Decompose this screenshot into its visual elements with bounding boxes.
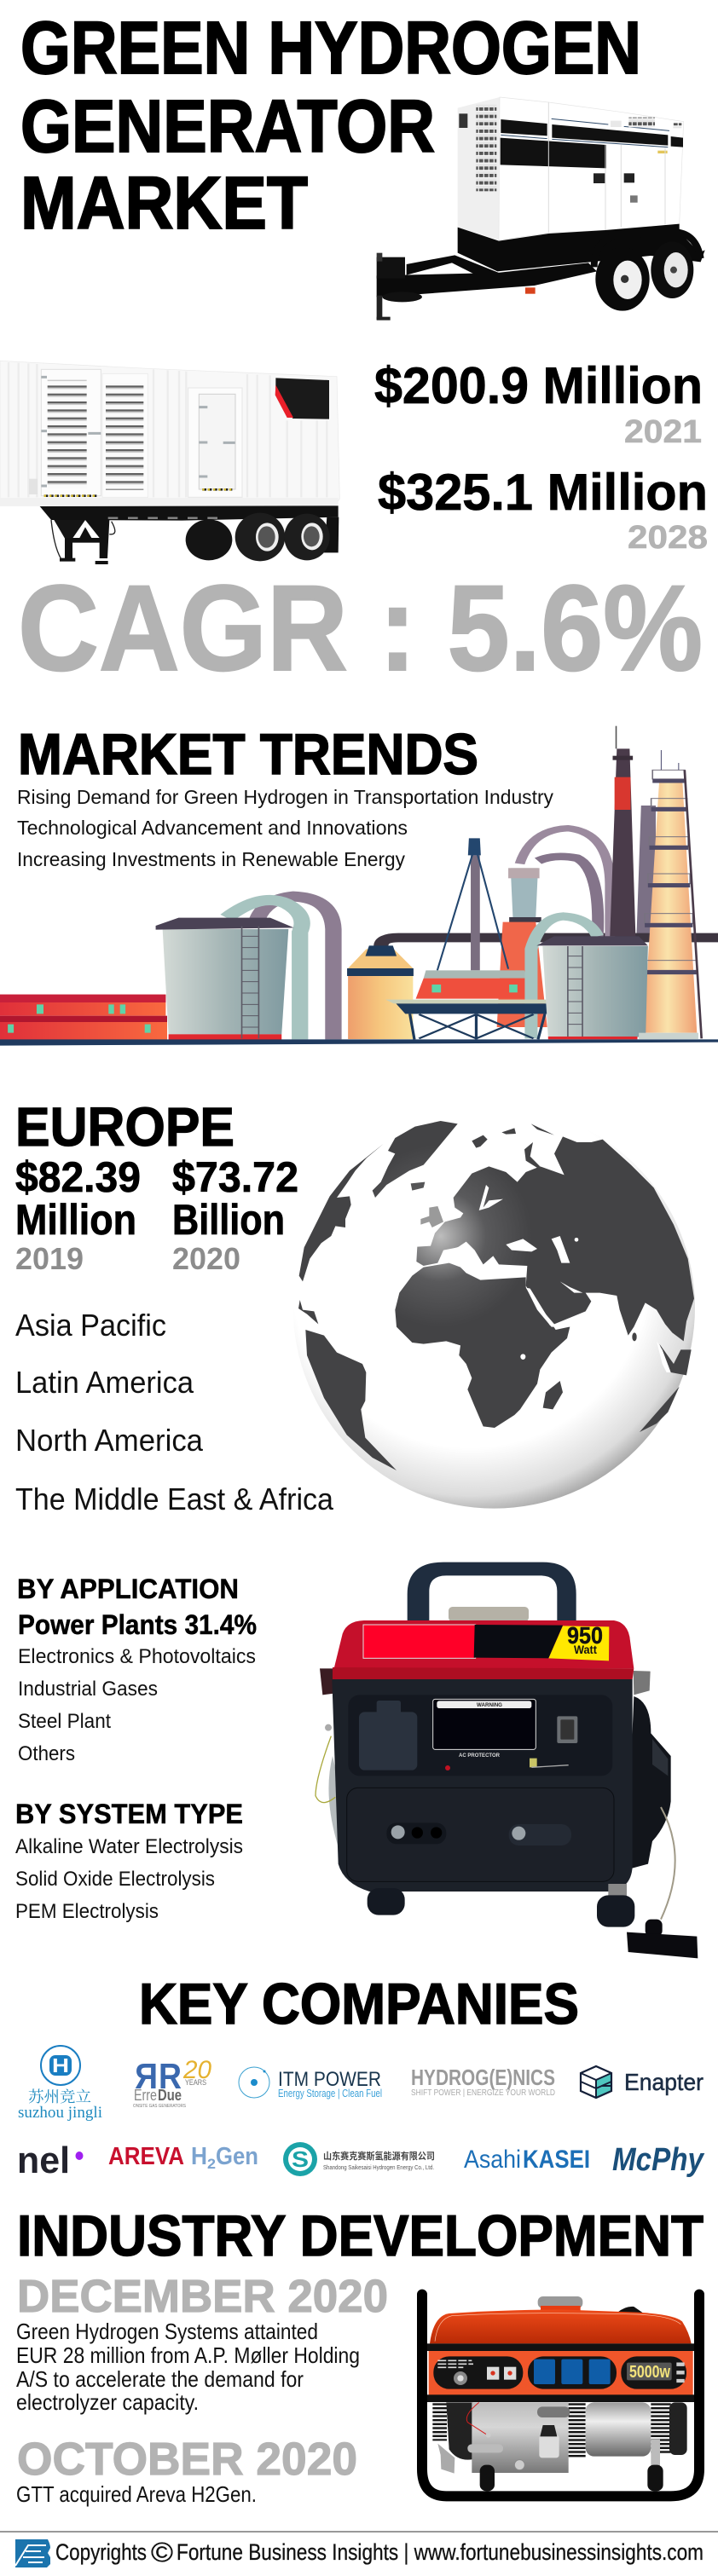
logo: Asahi Kasei: [464, 2146, 590, 2174]
icon: globe: [293, 1106, 695, 1509]
segment: by system type: Alkaline Water Electrolysis: [15, 1835, 243, 1858]
logo: ITM Power: [239, 2067, 382, 2099]
image: mobile generator on tandem trailer: [377, 97, 705, 321]
development: October 2020: OCTOBER 2020: [17, 2434, 357, 2485]
stat: Europe 2020: [172, 1153, 298, 1276]
divider: [0, 2531, 718, 2533]
logo: ErreDue: R: [159, 2056, 182, 2096]
development: December 2020: EUR 28 million from A.P. Møller Holding: [16, 2342, 360, 2368]
copyright text: Copyrights: [55, 2539, 147, 2565]
market size 2021: [374, 357, 703, 450]
illustration: industrial plant: [0, 726, 718, 1046]
logo: Areva H2Gen: H: [191, 2143, 207, 2170]
segment: by application: Industrial Gases: [18, 1678, 158, 1701]
heading: key companies: KEY COMPANIES: [139, 1972, 579, 2036]
development: December 2020: electrolyzer capacity.: [16, 2389, 199, 2415]
logo: ErreDue: YEARS: [185, 2078, 206, 2087]
logo: ErreDue: R: [135, 2056, 158, 2096]
image: white container generator trailer: [0, 361, 339, 563]
image: orange 5000w generator: [422, 2295, 699, 2496]
logo: Hydrogenics: HYDROG(E)NICS: [411, 2065, 555, 2090]
market size 2021: 2021: [624, 414, 702, 450]
development: December 2020: A/S to accelerate the demand for: [16, 2366, 304, 2392]
list: other regions: North America: [15, 1423, 204, 1458]
title: MARKET: [20, 162, 308, 245]
logo: Areva H2Gen: 2: [207, 2156, 216, 2172]
logo: Enapter: Enapter: [624, 2069, 704, 2095]
logo: Suzhou Jingli: 苏州竞立: [28, 2085, 91, 2107]
logo: Suzhou Jingli: [18, 2046, 102, 2122]
stat: Europe 2019: Million: [15, 1196, 136, 1244]
image: portable 950 watt generator: AC PROTECTOR: [459, 1753, 501, 1759]
image: orange 5000w generator: 5000w: [629, 2363, 670, 2382]
title: GENERATOR: [20, 85, 435, 168]
logo: Suzhou Jingli: H: [52, 2054, 69, 2076]
title: GREEN HYDROGEN: [20, 7, 641, 90]
segment: by application: BY APPLICATION: [17, 1574, 239, 1604]
stat: Europe 2019: $82.39: [15, 1153, 141, 1201]
logo: Suzhou Jingli: suzhou jingli: [18, 2104, 102, 2122]
market size 2028: 2028: [628, 520, 708, 556]
logo: McPhy: McPhy: [612, 2142, 705, 2178]
stat: Europe 2020: 2020: [172, 1241, 240, 1276]
logo: Areva H2Gen: Gen: [216, 2143, 258, 2170]
logo: ITM Power: Energy Storage | Clean Fuel: [278, 2087, 382, 2099]
list: market trends: [17, 786, 553, 870]
development: October 2020: [16, 2434, 357, 2507]
list: market trends: Technological Advancement and Innovations: [17, 817, 408, 839]
logo: Shandong Saikesaisi: [283, 2142, 435, 2176]
segment: by application: Others: [18, 1742, 75, 1765]
list: other regions: Latin America: [15, 1365, 194, 1400]
segment: by system type: PEM Electrolysis: [15, 1900, 159, 1923]
logo: Hydrogenics: [411, 2065, 555, 2098]
stat: Europe 2019: [15, 1153, 141, 1276]
logo: Shandong Saikesaisi: Shandong Saikesaisi Hydrogen Energy Co., Ltd.: [323, 2165, 434, 2171]
logo: Shandong Saikesaisi: S: [292, 2146, 309, 2172]
logo: Areva H2Gen: AREVA: [108, 2143, 184, 2170]
market size 2028: [378, 464, 708, 556]
segment: by application: [17, 1574, 257, 1765]
logo: nel: nel: [17, 2140, 70, 2181]
image: portable 950 watt generator: 950: [567, 1622, 603, 1649]
image: portable 950 watt generator: Watt: [574, 1643, 597, 1656]
list: other regions: The Middle East & Africa: [15, 1481, 334, 1516]
list: other regions: Asia Pacific: [15, 1308, 166, 1343]
logo: ErreDue: Due: [158, 2087, 182, 2104]
logo: ErreDue: Erre: [134, 2087, 157, 2104]
segment: by application: Power Plants 31.4%: [18, 1609, 257, 1640]
heading: Europe: EUROPE: [15, 1096, 235, 1158]
heading: market trends: MARKET TRENDS: [18, 722, 478, 787]
logo: Asahi Kasei: Asahi: [464, 2146, 521, 2174]
image: portable 950 watt generator: WARNING: [477, 1703, 502, 1708]
logo: ErreDue: [133, 2056, 211, 2109]
copyright text: ©: [151, 2537, 173, 2567]
segment: by system type: [15, 1799, 243, 1923]
list: market trends: Rising Demand for Green Hydrogen in Transportation Industry: [17, 786, 553, 808]
footer: [15, 2537, 704, 2567]
market size 2021: $200.9 Million: [374, 357, 703, 414]
development: December 2020: Green Hydrogen Systems attainted: [16, 2319, 318, 2344]
stat: Europe 2019: 2019: [15, 1241, 84, 1276]
logo: ErreDue: ONSITE GAS GENERATORS: [133, 2104, 187, 2109]
logo: Enapter: [581, 2066, 704, 2098]
title: [20, 7, 641, 245]
logo: Hydrogenics: SHIFT POWER | ENERGIZE YOUR WORLD: [411, 2088, 555, 2098]
market size 2028: $325.1 Million: [378, 464, 708, 521]
segment: by system type: Solid Oxide Electrolysis: [15, 1868, 215, 1891]
stat: Europe 2020: Billion: [172, 1196, 285, 1244]
icon: Fortune Business Insights logo: [15, 2539, 50, 2567]
logo: Shandong Saikesaisi: 山东赛克赛斯氢能源有限公司: [323, 2150, 435, 2162]
segment: by application: Electronics & Photovoltaics: [18, 1645, 256, 1668]
segment: by system type: BY SYSTEM TYPE: [15, 1799, 243, 1829]
stat: Europe 2020: $73.72: [172, 1153, 298, 1201]
copyright text: [55, 2537, 704, 2567]
logo: Areva H2Gen: [108, 2143, 258, 2172]
development: October 2020: GTT acquired Areva H2Gen.: [16, 2481, 257, 2507]
logo: ITM Power: ITM POWER: [278, 2068, 381, 2091]
logo: ErreDue: 20: [182, 2056, 211, 2084]
development: December 2020: DECEMBER 2020: [17, 2271, 388, 2322]
segment: by application: Steel Plant: [18, 1710, 111, 1733]
list: market trends: Increasing Investments in Renewable Energy: [17, 848, 405, 870]
image: portable 950 watt generator: [316, 1562, 698, 1958]
list: other regions: [15, 1308, 334, 1516]
logo: Asahi Kasei: KASEI: [523, 2146, 590, 2174]
development: December 2020: [16, 2271, 388, 2415]
